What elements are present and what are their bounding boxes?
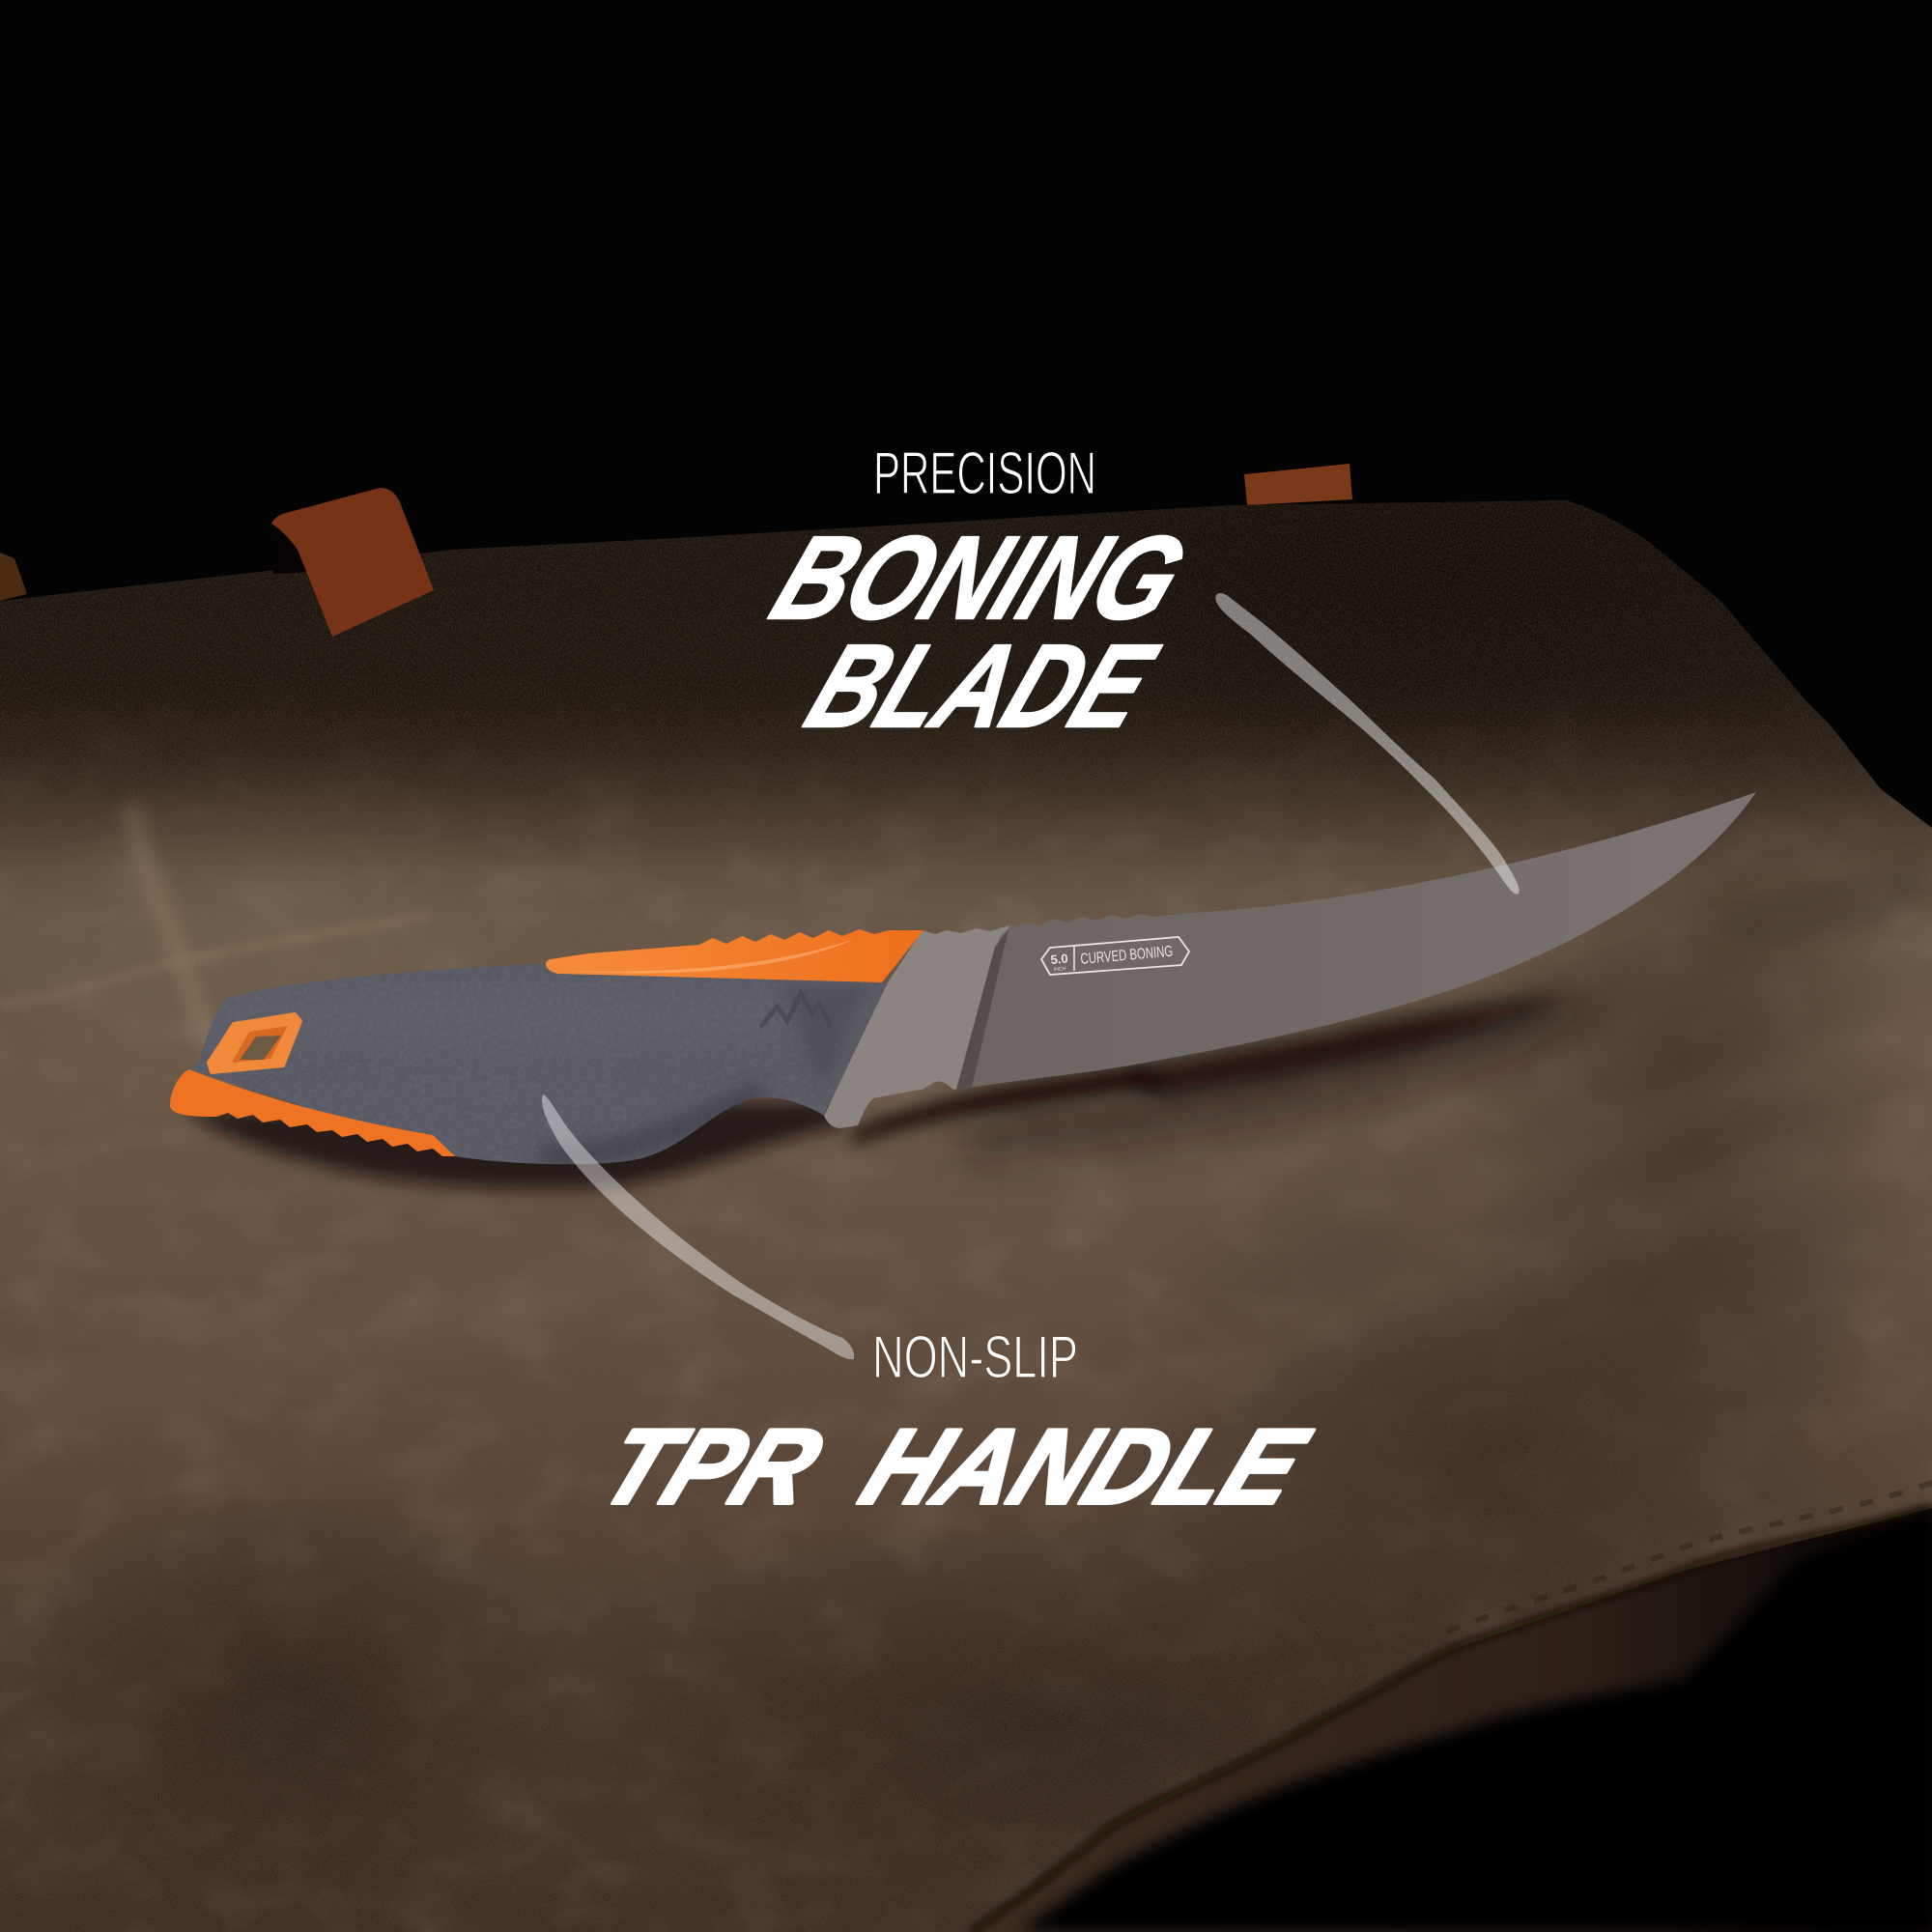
top grip highlight bbox=[565, 939, 855, 973]
title: boning: BONING bbox=[756, 511, 1204, 643]
bottom orange grip bbox=[170, 1069, 455, 1156]
rear leather strap bbox=[1244, 464, 1352, 505]
lower cloth fold bbox=[971, 1483, 1932, 1932]
subtitle: non-slip: NON-SLIP bbox=[872, 1324, 1078, 1391]
handle heading bbox=[584, 1324, 1323, 1526]
waxed canvas cloth bbox=[0, 386, 1932, 1932]
front leather strap bbox=[271, 488, 434, 637]
mountain logo bbox=[760, 993, 831, 1027]
blade tang bbox=[824, 925, 1009, 1128]
top orange grip bbox=[546, 929, 923, 982]
knife shadow bbox=[184, 985, 1623, 1189]
subtitle: precision: PRECISION bbox=[873, 440, 1096, 507]
handle grip texture bbox=[214, 980, 862, 1164]
blade size label bbox=[1041, 937, 1189, 975]
callout line to blade bbox=[1215, 593, 1520, 895]
title: tpr handle: TPR HANDLE bbox=[584, 1407, 1323, 1526]
handle body bbox=[189, 963, 888, 1164]
blade size label: CURVED BONING bbox=[1080, 944, 1174, 968]
knife bbox=[170, 792, 1756, 1169]
blade bbox=[956, 792, 1756, 1090]
infographic scene bbox=[0, 452, 1932, 1932]
blade heading bbox=[756, 440, 1204, 752]
far-left leather strap bbox=[0, 553, 27, 601]
blade size label: INCH bbox=[1054, 966, 1066, 973]
blade bevel bbox=[956, 929, 1009, 1090]
callout line to handle bbox=[542, 1094, 854, 1359]
lanyard loop bbox=[209, 1014, 300, 1072]
blade size label: 5.0 bbox=[1050, 951, 1068, 967]
title: blade: BLADE bbox=[791, 619, 1173, 752]
